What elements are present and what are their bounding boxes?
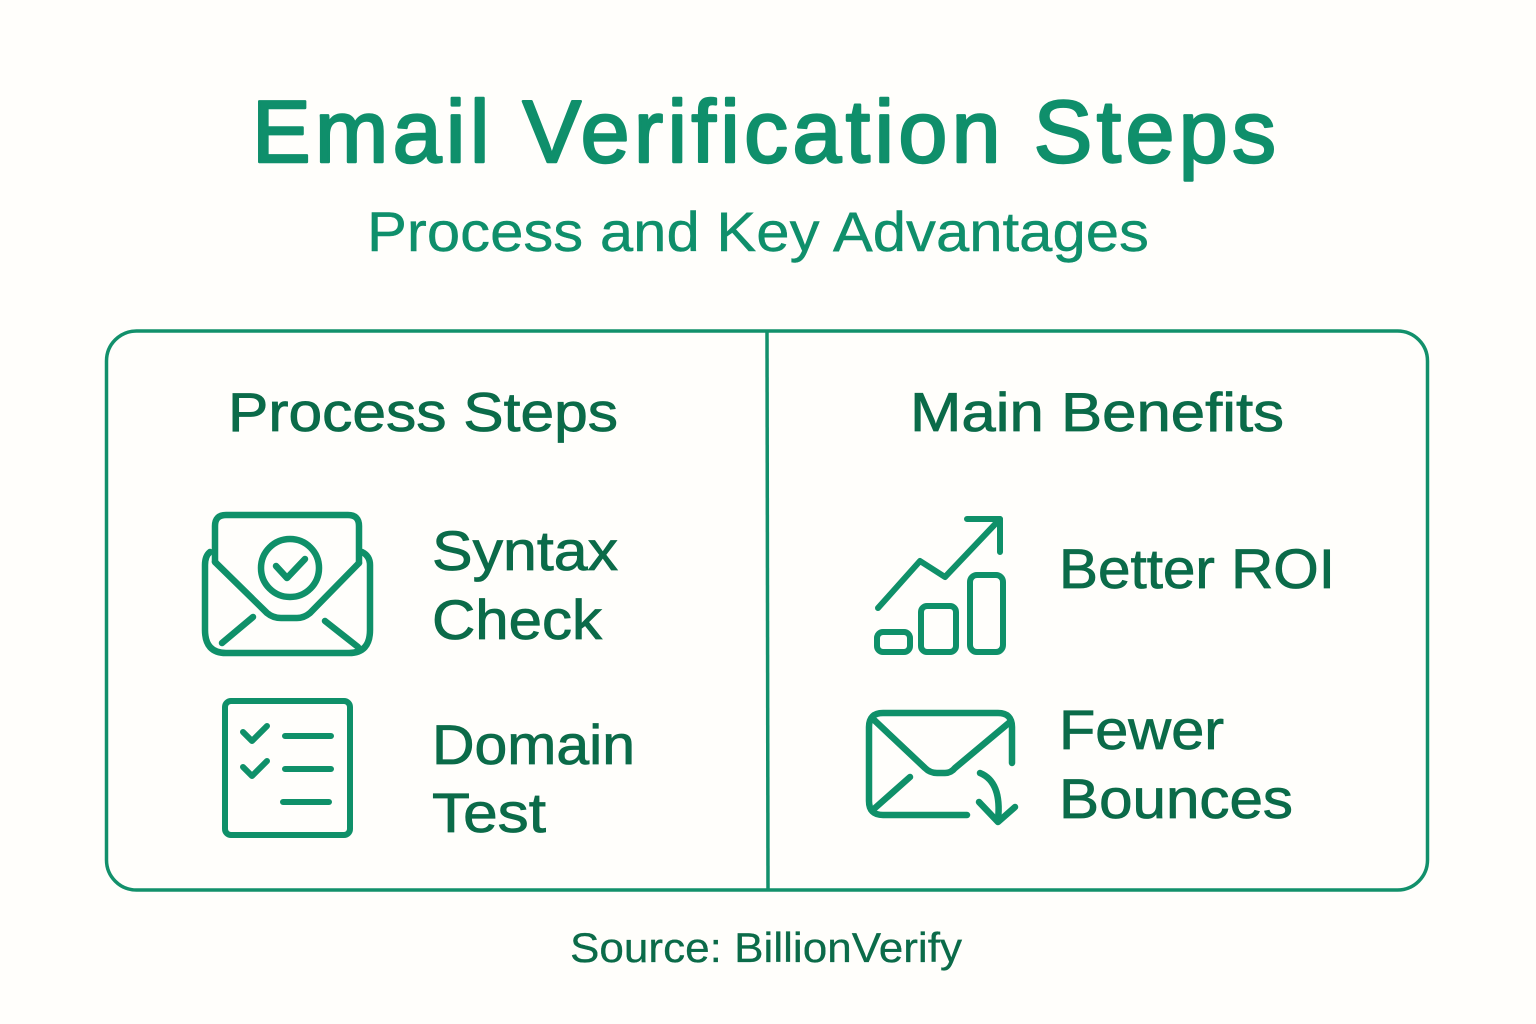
panel: main benefits [869,381,1335,830]
label: syntax check: Check [432,588,603,651]
icon: growth chart [877,519,1003,652]
heading: main benefits: Main Benefits [910,381,1284,443]
label: syntax check: Syntax [432,519,618,582]
subtitle: Process and Key Advantages [367,200,1149,263]
label: better roi: Better ROI [1059,537,1335,600]
icon: checklist [225,701,350,835]
panel: process steps [205,381,635,844]
icon: envelope with check [205,515,370,653]
heading: process steps: Process Steps [228,381,618,443]
label: domain test: Test [432,781,546,844]
label: fewer bounces: Fewer [1059,698,1224,761]
label: domain test: Domain [432,713,635,776]
panel: comparison card [106,330,1428,890]
icon: envelope with down arrow [869,713,1015,822]
title: Email Verification Steps [252,82,1276,181]
label: fewer bounces: Bounces [1059,767,1293,830]
source note: Source: BillionVerify [570,924,962,971]
